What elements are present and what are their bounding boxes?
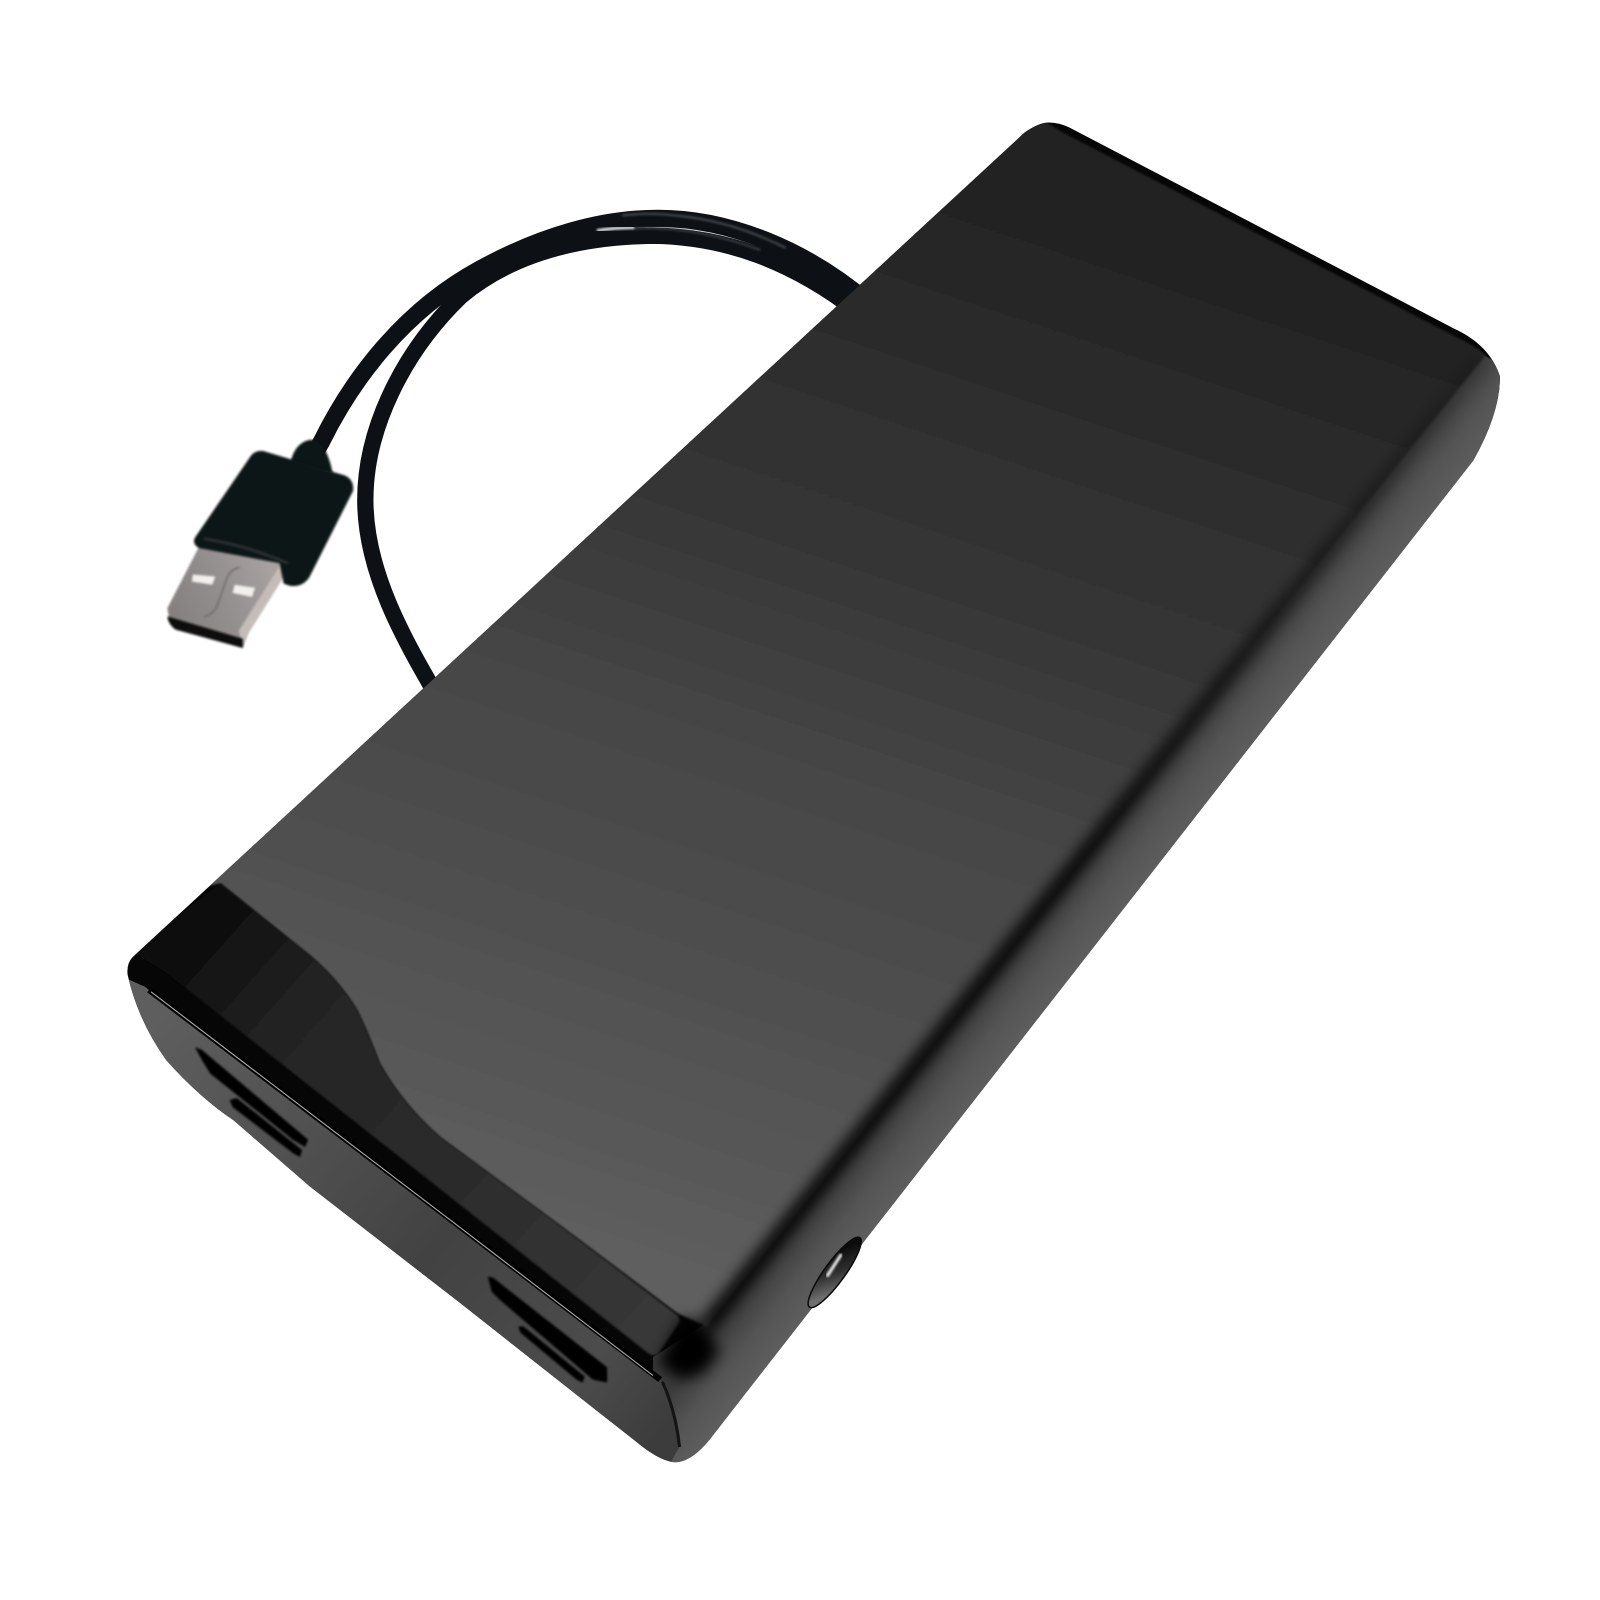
black corner where band meets side	[658, 1318, 718, 1380]
plug centre seam	[204, 567, 240, 616]
power bank body	[117, 112, 1551, 1480]
product illustration: power bank with attached cable	[127, 122, 1500, 1462]
plug metal shell	[167, 543, 284, 647]
front panel	[117, 974, 680, 1474]
shadow groove between face and side	[706, 359, 1482, 1327]
black end band	[117, 884, 718, 1474]
port: right USB-A	[488, 1277, 607, 1383]
front panel seam	[149, 990, 660, 1380]
plug shell side face	[239, 563, 290, 647]
panel right rim	[662, 1382, 680, 1447]
cable: two black wires looping from USB plug into the power bank	[308, 214, 867, 699]
top face	[194, 112, 1486, 1327]
plug shell lower lip	[167, 616, 243, 648]
plug contact windows	[192, 574, 215, 585]
port: left USB-C	[230, 1098, 302, 1157]
USB-A plug	[167, 440, 353, 648]
port: right USB-C	[518, 1327, 585, 1383]
overmold bevel sheen	[204, 539, 288, 563]
side button	[801, 1232, 868, 1313]
body silhouette	[127, 122, 1500, 1462]
plug overmold	[194, 451, 353, 586]
port: left USB-A	[195, 1047, 308, 1147]
cable highlights	[622, 214, 786, 248]
strain relief	[290, 440, 333, 473]
side strip with soft shading	[653, 352, 1551, 1480]
